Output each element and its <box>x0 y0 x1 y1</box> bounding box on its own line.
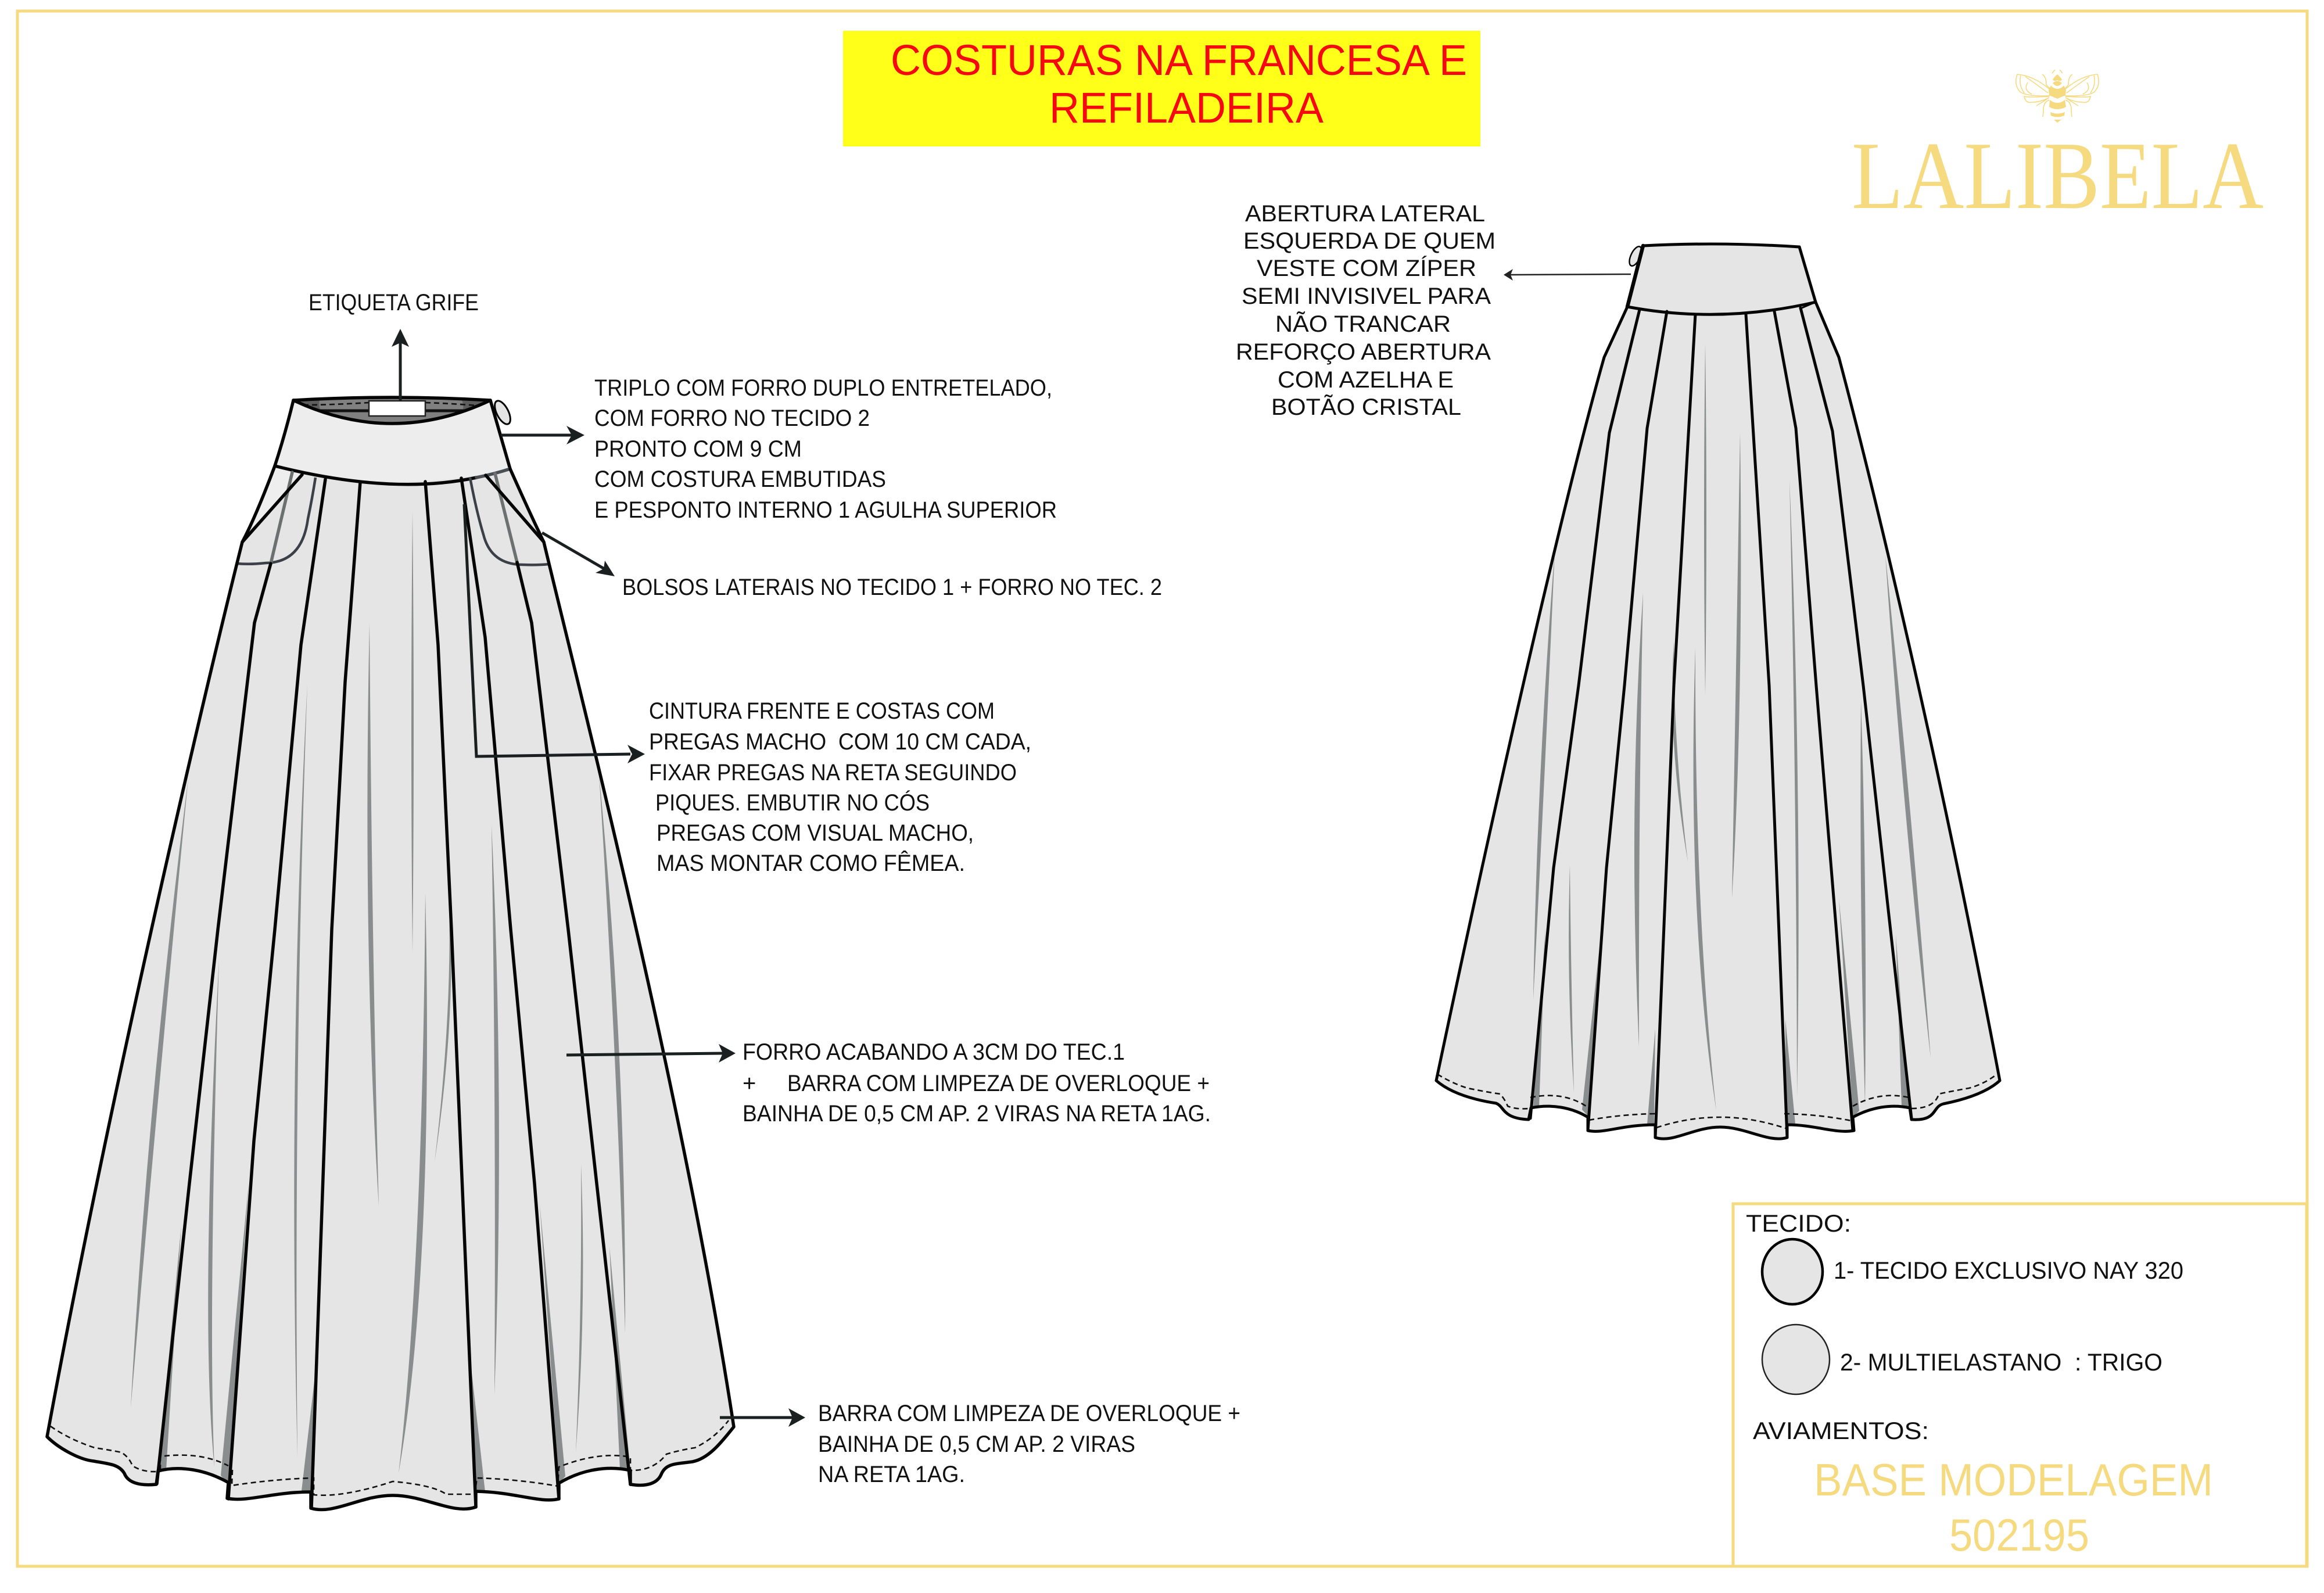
annotation: pockets: BOLSOS LATERAIS NO TECIDO 1 + FORRO NO TEC. 2 <box>622 575 1162 600</box>
panel: fabric legend <box>1733 1204 2307 1566</box>
annotation: side opening: BOTÃO CRISTAL <box>1271 394 1461 420</box>
annotation: side opening: REFORÇO ABERTURA <box>1236 339 1491 365</box>
waistband outlines <box>1627 244 1816 314</box>
skirt body <box>1436 302 2000 1139</box>
annotation: etiqueta grife: ETIQUETA GRIFE <box>309 290 479 315</box>
waistband outlines <box>275 397 510 485</box>
annotation: hem: BAINHA DE 0,5 CM AP. 2 VIRAS <box>818 1431 1135 1457</box>
annotation: lining: BAINHA DE 0,5 CM AP. 2 VIRAS NA RETA 1AG. <box>743 1101 1211 1126</box>
arrow: pleats <box>464 504 645 763</box>
fabric folds <box>1533 344 1931 1125</box>
icon: bee <box>2016 70 2099 123</box>
annotation: waistband <box>594 375 1057 523</box>
annotation: pleats: PREGAS MACHO COM 10 CM CADA, <box>649 729 1031 755</box>
pleat lines <box>157 472 630 1508</box>
swatch: fabric 1 <box>1762 1239 1823 1304</box>
heading: aviamentos: AVIAMENTOS: <box>1753 1417 1929 1444</box>
title banner <box>843 31 1480 146</box>
annotation: hem: BARRA COM LIMPEZA DE OVERLOQUE + <box>818 1401 1240 1426</box>
base modelagem reference: BASE MODELAGEM <box>1814 1454 2213 1505</box>
waistband <box>1627 244 1816 314</box>
annotation: pleats: PIQUES. EMBUTIR NO CÓS <box>655 790 930 816</box>
waistband <box>275 400 510 482</box>
pocket bags <box>237 478 549 565</box>
arrow: side opening <box>1504 269 1631 281</box>
annotation: pleats: PREGAS COM VISUAL MACHO, <box>657 820 974 846</box>
pleat lines <box>1530 308 1911 1138</box>
annotation: lining <box>743 1039 1211 1126</box>
hem stitching <box>51 1420 729 1495</box>
base modelagem reference: 502195 <box>1949 1509 2089 1560</box>
legend text: fabric 1: 1- TECIDO EXCLUSIVO NAY 320 <box>1834 1257 2183 1284</box>
annotation: lining: + <box>743 1071 756 1096</box>
legend text: fabric 2: 2- MULTIELASTANO : TRIGO <box>1840 1348 2162 1376</box>
annotation: side opening: ESQUERDA DE QUEM <box>1243 228 1495 254</box>
heading: tecido: TECIDO: <box>1746 1210 1851 1237</box>
title banner: REFILADEIRA <box>1049 84 1324 132</box>
logo wordmark: LALIBELA <box>1852 122 2264 229</box>
annotation: side opening: COM AZELHA E <box>1278 367 1454 393</box>
title banner: COSTURAS NA FRANCESA E <box>891 36 1467 84</box>
swatch: fabric 2 <box>1762 1325 1830 1394</box>
label tag <box>369 401 425 416</box>
fabric folds <box>131 512 630 1492</box>
pockets light fill <box>242 466 302 542</box>
skirt outer outline <box>47 466 734 1510</box>
annotation: hem: NA RETA 1AG. <box>818 1462 965 1487</box>
annotation: side opening: SEMI INVISIVEL PARA <box>1242 284 1491 309</box>
annotation: lining: FORRO ACABANDO A 3CM DO TEC.1 <box>743 1039 1125 1065</box>
annotation: waistband: TRIPLO COM FORRO DUPLO ENTRETELADO, <box>594 375 1052 401</box>
annotation: pleats: CINTURA FRENTE E COSTAS COM <box>649 698 995 724</box>
skirt body <box>47 466 734 1510</box>
arrow: pockets <box>542 533 615 576</box>
annotation: waistband: COM COSTURA EMBUTIDAS <box>594 467 886 492</box>
annotation: waistband: COM FORRO NO TECIDO 2 <box>594 406 870 431</box>
arrow: waistband <box>501 426 584 444</box>
waistband interior <box>293 397 490 424</box>
annotation: hem <box>818 1401 1240 1487</box>
arrow: lining <box>566 1044 736 1063</box>
annotation: waistband: PRONTO COM 9 CM <box>594 436 802 462</box>
hem stitching <box>1437 1074 1997 1128</box>
arrow: hem <box>720 1408 805 1427</box>
annotation: side opening: ABERTURA LATERAL <box>1245 201 1485 227</box>
skirt outer outline <box>1436 302 2000 1139</box>
annotation: waistband: E PESPONTO INTERNO 1 AGULHA SUPERIOR <box>594 497 1057 523</box>
annotation: pleats: MAS MONTAR COMO FÊMEA. <box>657 850 965 876</box>
brand logo <box>1852 70 2264 229</box>
base modelagem reference <box>1814 1454 2213 1560</box>
arrow: etiqueta <box>392 329 409 401</box>
front skirt drawing <box>47 397 734 1510</box>
zipper pull loop <box>492 399 514 426</box>
annotation: pleats: FIXAR PREGAS NA RETA SEGUINDO <box>649 760 1017 785</box>
annotation: side opening <box>1236 201 1495 420</box>
zipper pull loop <box>1627 245 1644 268</box>
annotation: side opening: VESTE COM ZÍPER <box>1257 255 1476 281</box>
annotation: pleats <box>649 698 1031 876</box>
annotation: side opening: NÃO TRANCAR <box>1275 311 1451 337</box>
back skirt drawing <box>1436 244 2000 1139</box>
annotation: lining: BARRA COM LIMPEZA DE OVERLOQUE + <box>787 1071 1210 1096</box>
